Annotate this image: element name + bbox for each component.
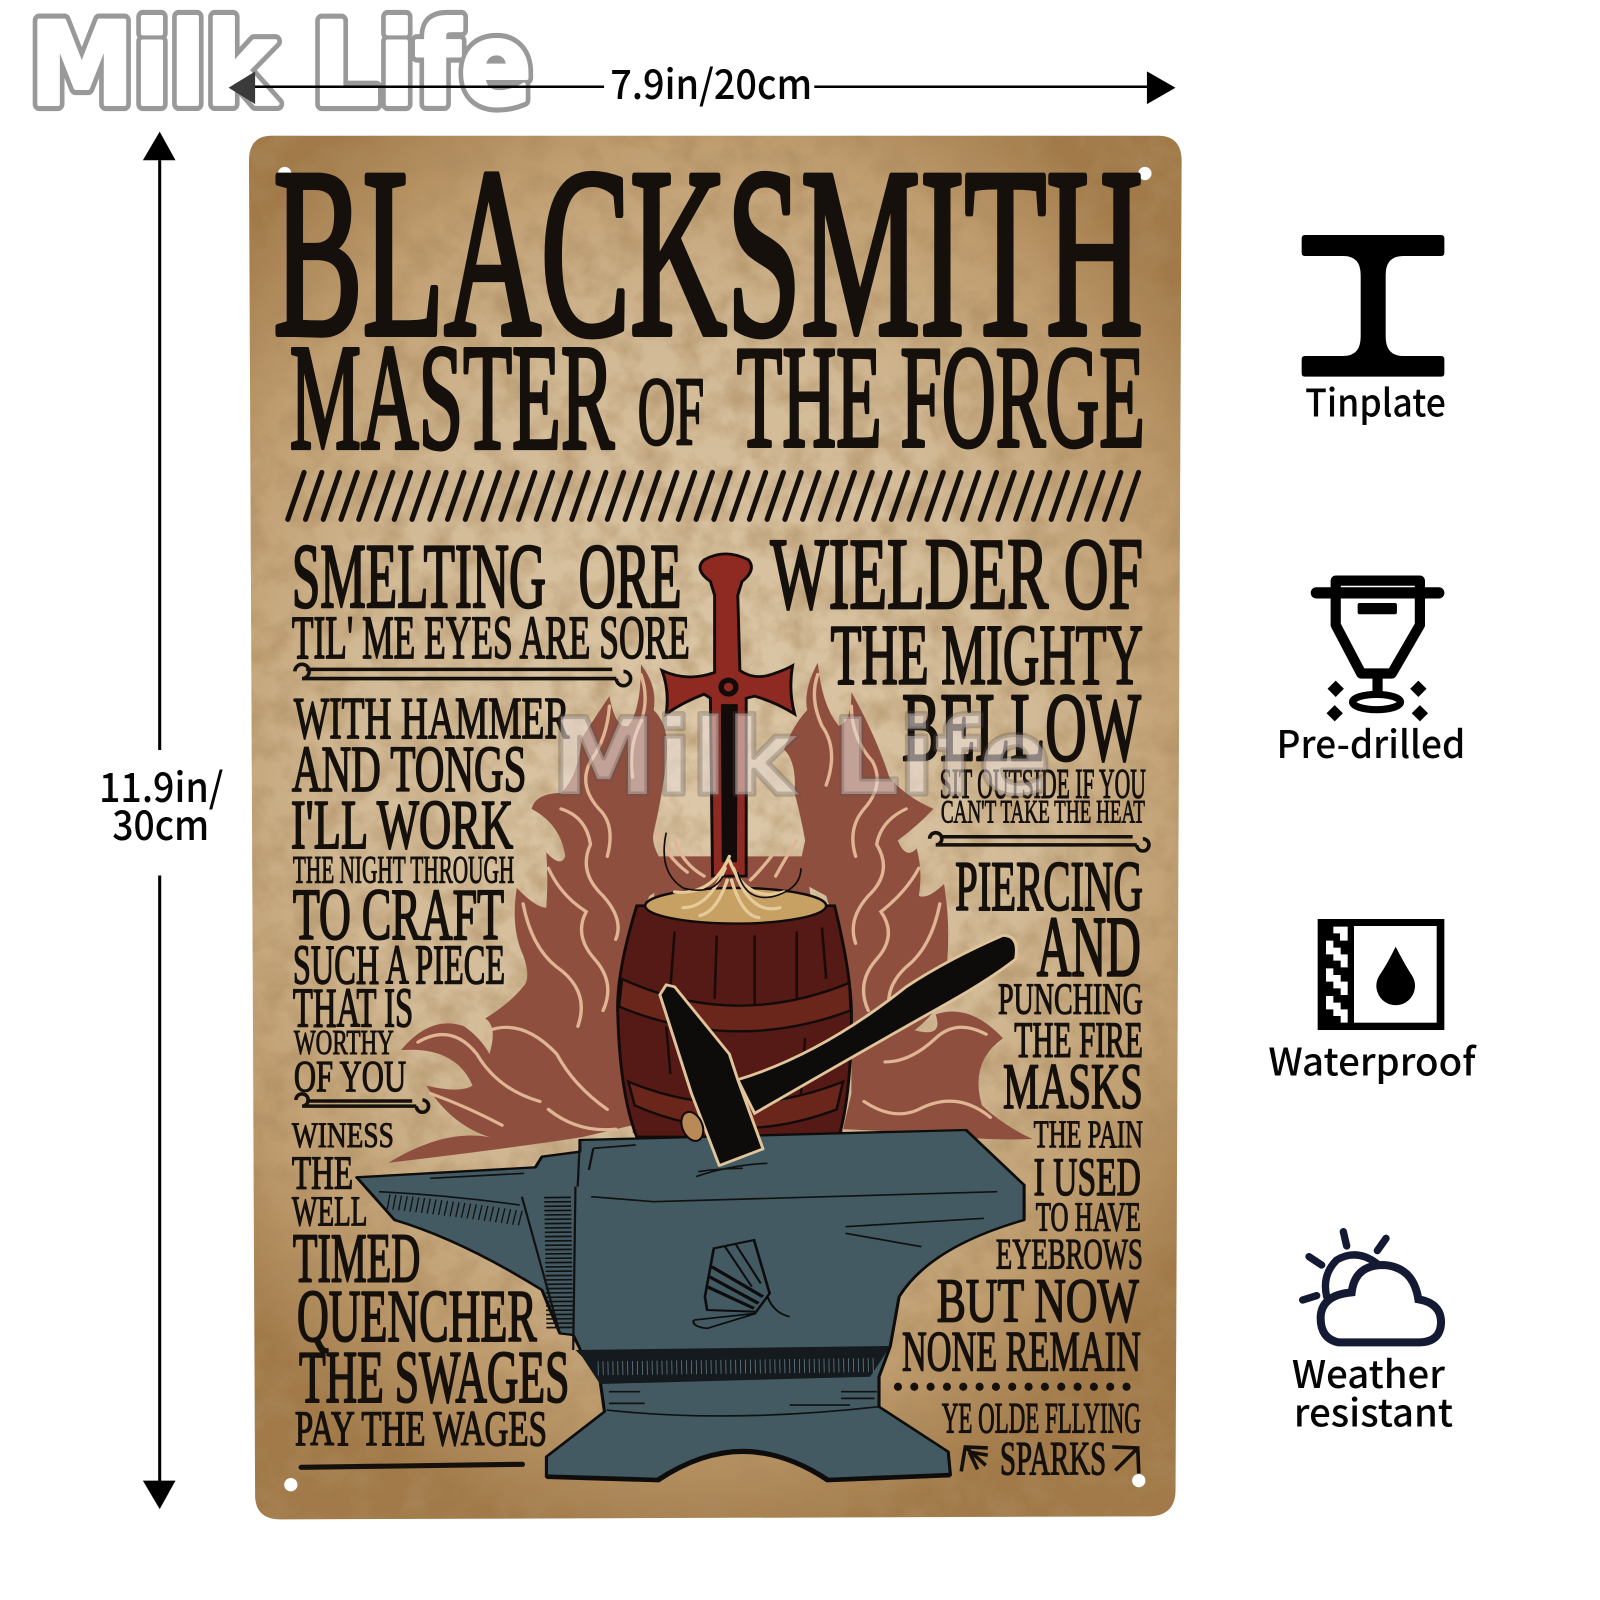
left column poem text: PAY THE WAGES [295,1400,547,1456]
left column poem text: SMELTING [292,525,546,627]
feature: waterproof [1268,919,1477,1087]
icon: sun and cloud [1303,1232,1441,1342]
feature: weather resistant [1292,1232,1453,1438]
faint watermark on plate: Milk Life [551,696,1051,820]
icon: I-beam [1302,235,1444,377]
left column poem text: TIMED [293,1220,420,1298]
anvil emblem [693,1240,790,1328]
brand watermark: Milk Life: Milk Life [30,0,532,131]
feature: weather resistant: resistant [1294,1383,1453,1438]
feature: weather resistant: Weather [1292,1344,1445,1399]
right column poem text: SIT OUTSIDE IF YOU [940,762,1146,808]
left column poem text: WITH HAMMER [294,685,570,751]
right column poem text: NONE REMAIN [902,1320,1141,1383]
illustration: anvil [357,1130,1024,1480]
straw at sword base [675,856,784,918]
left column poem text: SUCH A PIECE [293,935,505,997]
left column poem text: THE SWAGES [299,1337,569,1419]
left column poem text: WINESS [292,1115,394,1155]
right column poem text: THE MIGHTY [831,608,1143,703]
left column poem text: TIL' ME EYES ARE SORE [292,604,690,672]
icon: drill [1316,581,1439,721]
right column poem text: BUT NOW [937,1267,1139,1335]
right column poem text: THE PAIN [1034,1113,1143,1156]
height label: 11.9in/ [99,755,224,814]
height dimension arrow [99,132,224,1509]
spark arrows [961,1447,1139,1473]
right column poem text: I USED [1034,1147,1141,1207]
scroll divider [295,664,631,686]
right column poem text: WIELDER OF [770,518,1143,631]
height label [99,755,224,852]
feature: pre-drilled: Pre-drilled [1277,714,1465,769]
left column poem text: AND TONGS [292,734,527,806]
right column poem text: MASKS [1003,1051,1143,1122]
right column poem text: EYEBROWS [996,1230,1143,1278]
subtitle: Master of the Forge: OF [638,358,704,466]
left column poem text: I'LL WORK [291,786,513,864]
right column poem text: CAN'T TAKE THE HEAT [941,794,1145,830]
feature: tinplate [1302,235,1446,427]
left column poem text: ORE [579,525,682,627]
right column poem text: YE OLDE FLLYING [942,1395,1141,1443]
illustration: flames, sword, barrel, hammer handle [388,554,1032,1163]
slash rule [288,472,1139,519]
width dimension arrow [229,52,1176,111]
right column poem text: BELLOW [902,674,1141,782]
left column poem text: THE [292,1147,353,1200]
right column poem text: PUNCHING [998,973,1143,1023]
left column poem text: TO CRAFT [293,874,504,955]
feature: waterproof: Waterproof [1268,1032,1477,1087]
left column poem text: WELL [292,1190,367,1236]
straw outline curves [664,833,801,897]
left column poem text: THAT IS [293,978,413,1040]
right column poem text: AND [1037,900,1141,995]
left column poem text: WORTHY [294,1023,394,1062]
right column poem text: PIERCING [955,847,1143,926]
width label: 7.9in/20cm [610,52,812,111]
right column poem text: SPARKS [1000,1432,1106,1485]
brand watermark: Milk Life: Milk Life [30,0,532,131]
mounting holes [278,167,1152,1491]
flames [388,663,1032,1163]
panel: tin sign plate [249,136,1182,1519]
subtitle: Master of the Forge: THE FORGE [737,316,1145,478]
subtitle: Master of the Forge: MASTER [290,313,614,481]
feature: pre-drilled [1277,581,1465,769]
scroll divider 2 [296,1094,429,1112]
left column poem text: THE NIGHT THROUGH [293,849,514,892]
hammer handle [738,935,1016,1113]
anvil shading lines [379,1140,997,1416]
icon: waterproof layer and drop [1318,919,1444,1030]
scroll divider 3 [930,833,1149,851]
left column poem text: QUENCHER [297,1276,537,1358]
right column poem text [770,518,1149,1485]
barrel [618,888,851,1137]
right column poem text: TO HAVE [1036,1195,1141,1240]
end bar [301,1464,522,1467]
left column poem text: OF YOU [294,1051,406,1101]
feature: tinplate: Tinplate [1305,372,1446,427]
right column poem text: THE FIRE [1014,1013,1143,1069]
dotted rule [898,1383,1141,1391]
hammer head [660,985,763,1166]
sword [662,554,795,876]
left column poem text [291,525,690,1467]
height label: 30cm [112,793,209,852]
